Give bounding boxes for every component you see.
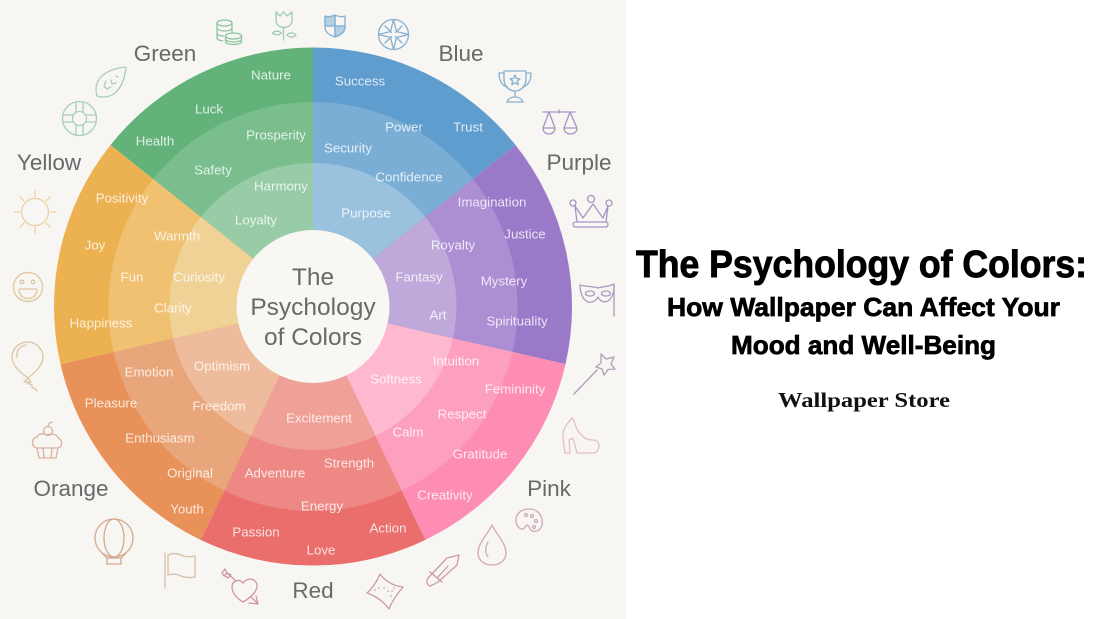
wheel wedge: Yellow: Clarity: [154, 300, 192, 315]
wheel centre title: The: [292, 264, 334, 291]
wheel wedge: Green: Luck: [195, 101, 223, 116]
wheel wedge: Green: [110, 48, 313, 306]
icon: smiley face: [14, 272, 42, 302]
icon: leaf: [96, 67, 126, 97]
wheel wedge: Yellow: Positivity: [96, 190, 149, 205]
wheel wedge: Green: Safety: [194, 162, 232, 177]
icon: hot air balloon: [95, 519, 133, 564]
wheel wedge: Orange: Youth: [170, 501, 204, 516]
color name labels: Pink: [527, 476, 572, 501]
wheel wedge: Yellow: Warmth: [154, 228, 200, 243]
wheel wedge: Pink: Calm: [392, 424, 424, 439]
icon: tulip: [272, 12, 296, 40]
icon: flag: [165, 553, 195, 588]
wheel wedge: Purple: [313, 145, 572, 364]
wheel wedge: Yellow: Happiness: [70, 315, 133, 330]
wheel wedge: Purple: Mystery: [481, 273, 528, 288]
wheel wedge: Green: Harmony: [254, 178, 308, 193]
icon: sun: [14, 191, 56, 233]
color name labels: [17, 41, 612, 603]
wheel wedge: Pink: Respect: [438, 406, 487, 421]
icon: lifebuoy: [62, 102, 96, 136]
color name labels: Orange: [33, 476, 109, 501]
heading: subtitle line one: How Wallpaper Can Affect Your: [667, 292, 1060, 322]
color name labels: Yellow: [17, 150, 82, 175]
wheel wedge: Blue: Security: [324, 140, 372, 155]
wheel wedge: Pink: Creativity: [417, 487, 473, 502]
icon: high heel: [563, 418, 599, 453]
wheel wedge: Purple: Royalty: [431, 237, 476, 252]
wheel wedge: Purple: Imagination: [458, 194, 526, 209]
wheel wedge: Green: Loyalty: [235, 212, 277, 227]
wheel centre title: of Colors: [264, 324, 362, 351]
heading: subtitle line two: Mood and Well-Being: [731, 330, 996, 360]
wheel wedge: Red: Passion: [232, 524, 280, 539]
icon: crown: [570, 196, 612, 227]
wheel wedge: Pink: Femininity: [485, 381, 546, 396]
icon: sword: [427, 555, 459, 586]
wheel wedge: Pink: Softness: [370, 371, 422, 386]
wheel wedge: Blue: Power: [385, 119, 423, 134]
wheel wedge: Green: Health: [136, 133, 174, 148]
wheel wedge: Red: Excitement: [286, 410, 352, 425]
wheel wedge: Red: Action: [370, 520, 406, 535]
wheel wedge: Yellow: Curiosity: [173, 269, 225, 284]
icon: trophy: [499, 71, 531, 102]
wheel wedge: Green: Nature: [251, 67, 291, 82]
wheel wedge: Orange: Optimism: [194, 358, 250, 373]
icon: compass: [378, 20, 408, 50]
color name labels: Red: [292, 578, 334, 603]
panel: color wheel infographic: [0, 0, 626, 619]
wheel wedge: Red: Energy: [301, 498, 343, 513]
wheel wedge: Blue: [313, 48, 516, 306]
wheel wedge: Pink: [313, 306, 566, 540]
wheel wedge: Orange: Emotion: [125, 364, 173, 379]
icon: shield: [325, 15, 345, 37]
wheel wedge: Red: Strength: [324, 455, 374, 470]
text block: brand name: Wallpaper Store: [778, 388, 950, 412]
wheel wedge: Orange: Enthusiasm: [125, 430, 195, 445]
icon: cupcake: [32, 422, 62, 458]
wheel wedge: Pink: Intuition: [433, 353, 479, 368]
wheel wedge: Blue: Confidence: [375, 169, 443, 184]
icon: water drop: [478, 525, 506, 565]
icon: party balloon: [12, 342, 43, 391]
wheel wedge: Orange: Original: [167, 465, 213, 480]
wheel wedge: Green: Prosperity: [246, 127, 306, 142]
wheel wedge: Purple: Spirituality: [486, 313, 548, 328]
wheel wedge: Orange: [60, 306, 313, 540]
icon: mask: [580, 284, 614, 316]
wheel wedge: Blue: Success: [335, 73, 385, 88]
color name labels: Blue: [438, 41, 484, 66]
icon: magic wand: [574, 354, 615, 394]
wheel wedge: Yellow: [54, 145, 313, 364]
wheel wedge: Red: Love: [307, 542, 335, 557]
icon: heart with arrow: [222, 569, 258, 604]
icon: scales: [543, 110, 577, 134]
color name labels: Purple: [546, 150, 612, 175]
wheel centre title: Psychology: [250, 294, 376, 321]
icon: coins: [217, 20, 242, 44]
color name labels: Green: [134, 41, 196, 66]
wheel wedge: Purple: Justice: [504, 226, 546, 241]
wheel wedge: Orange: Freedom: [192, 398, 246, 413]
icon: map: [367, 574, 403, 609]
wheel wedge: Orange: Pleasure: [85, 395, 137, 410]
wheel wedge: Red: Adventure: [245, 465, 305, 480]
icon: palette: [516, 509, 542, 531]
wheel wedge: Purple: Fantasy: [395, 269, 443, 284]
wheel wedge: Yellow: Joy: [85, 237, 106, 252]
wheel centre title: [236, 230, 390, 383]
wheel wedge: Blue: Trust: [453, 119, 483, 134]
wheel wedge: Pink: Gratitude: [453, 446, 507, 461]
wheel wedge: Purple: Art: [430, 307, 447, 322]
wheel wedge: Yellow: Fun: [121, 269, 143, 284]
wheel wedge: Blue: Purpose: [341, 205, 391, 220]
wheel wedge: Red: [201, 306, 425, 566]
